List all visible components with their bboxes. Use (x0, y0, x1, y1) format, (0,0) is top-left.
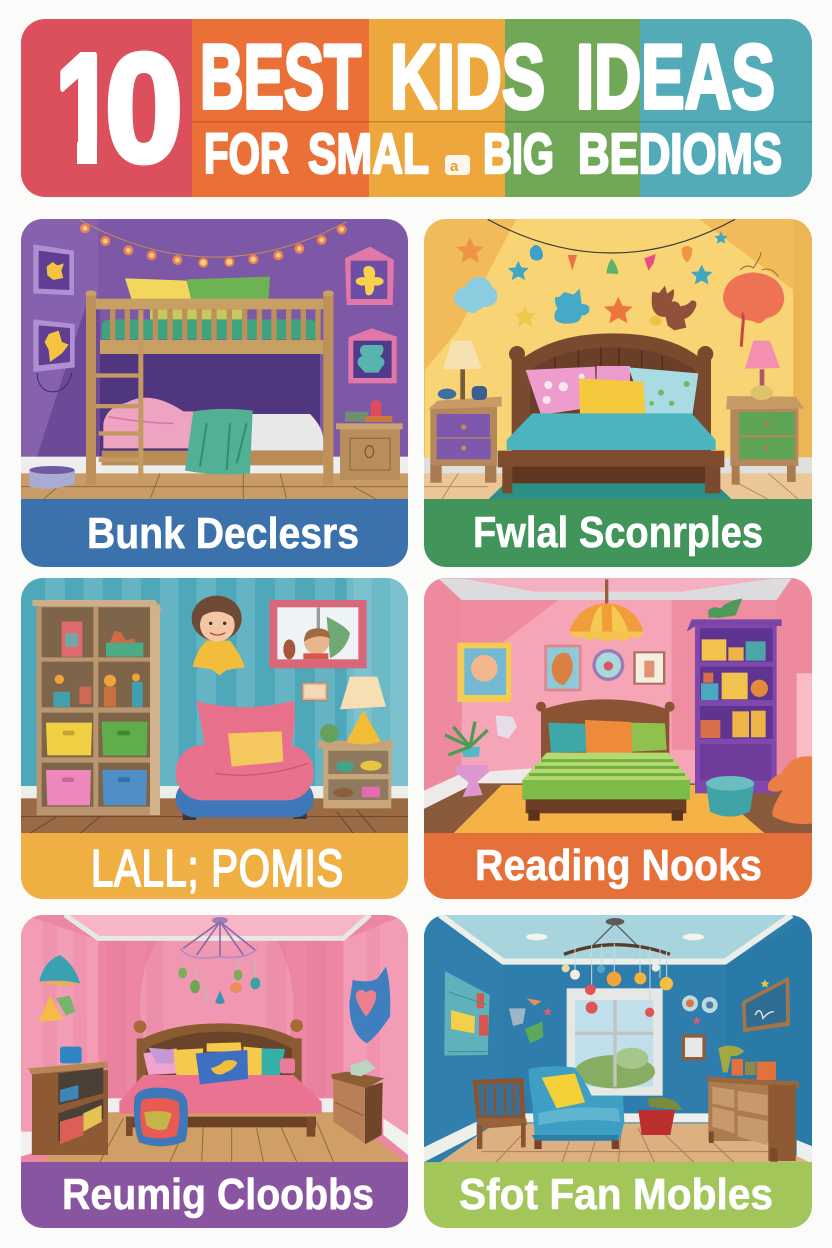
title line two: FOR (204, 122, 289, 186)
bed (119, 1019, 322, 1137)
wall hats (38, 955, 80, 1022)
mobile chandelier (178, 917, 260, 1005)
red bin (638, 1097, 683, 1135)
panel: wall sconces (422, 217, 815, 567)
nightstand (336, 401, 403, 480)
ceiling trim (438, 578, 792, 600)
right nightstand (726, 341, 804, 485)
ceiling trim (65, 915, 370, 938)
illustration: teal striped room (20, 577, 410, 834)
title line two: a (450, 158, 459, 175)
window (567, 988, 663, 1096)
string lights (80, 220, 347, 268)
title line two: SMAL (308, 122, 429, 186)
blue heart shield (349, 967, 390, 1043)
cream lamp (443, 341, 482, 369)
small frame (682, 1034, 706, 1060)
title line one: KIDS (390, 27, 545, 128)
illustration: blue nursery (422, 913, 815, 1163)
framed window picture (269, 600, 367, 668)
wall stars (456, 232, 728, 326)
lower bed (247, 414, 323, 451)
under-bunk shadow (100, 353, 320, 457)
blue creature (554, 289, 590, 324)
lamp and side table (318, 677, 393, 808)
title line one: BEST (200, 27, 361, 128)
big number 10 (46, 22, 183, 194)
chalkboard (742, 977, 790, 1032)
wall decals left (509, 998, 552, 1043)
small wall picture (303, 683, 327, 700)
brown dragon (652, 286, 696, 330)
title line one (200, 27, 775, 128)
panel: pink room (20, 902, 410, 1228)
caption bar (424, 1162, 812, 1228)
pink chair (176, 701, 314, 820)
right dresser (331, 1060, 384, 1144)
storage bins (46, 723, 92, 755)
wall doll (192, 596, 245, 675)
floor basket (29, 466, 75, 489)
left bookcase (28, 1047, 108, 1155)
wall decals right (682, 995, 718, 1024)
garland (488, 219, 735, 274)
blue armchair (528, 1066, 624, 1149)
wall frames (33, 244, 397, 392)
orange plush (768, 756, 813, 824)
caption bar (21, 499, 408, 567)
teal tub (706, 776, 754, 817)
title banner (21, 19, 812, 197)
title line two (204, 122, 782, 186)
bunk bed (85, 277, 334, 485)
notice board (444, 971, 490, 1056)
caption: Reading Nooks: Reading Nooks (475, 841, 762, 890)
bed (522, 699, 690, 821)
caption: Reumig Cloobbs: Reumig Cloobbs (62, 1170, 374, 1219)
illustration: purple bunk room (20, 217, 410, 503)
yellow pillow (542, 1073, 585, 1108)
panel: soft fan mobiles (422, 913, 815, 1228)
panel: bunk beds (20, 217, 410, 567)
cloud (454, 277, 497, 313)
red lantern (723, 253, 784, 347)
caption: LALL; POMIS: LALL; POMIS (91, 840, 344, 898)
illustration: pink reading room (422, 577, 815, 837)
caption bar (424, 499, 812, 567)
bed (498, 333, 724, 493)
caption bar (21, 1162, 408, 1228)
caption: Sfot Fan Mobles: Sfot Fan Mobles (459, 1170, 773, 1219)
pink lamp (745, 341, 780, 369)
illustration: yellow bedroom (422, 217, 815, 503)
left nightstand (428, 341, 502, 483)
patterned cushion (134, 1088, 188, 1146)
ceiling trim (440, 915, 792, 962)
caption bar (21, 833, 408, 899)
purple bookcase (687, 599, 782, 793)
big number 10: 0 (105, 22, 183, 194)
caption: Bunk Declesrs: Bunk Declesrs (87, 509, 359, 558)
caption bar (424, 833, 812, 899)
banner colour bands (21, 19, 812, 197)
wall frames (457, 643, 665, 739)
illustration: pink bedroom (20, 902, 410, 1163)
title line two: BIG (483, 122, 554, 186)
big number 10: 1 (55, 22, 115, 194)
wooden chair (472, 1078, 527, 1149)
plant stand (445, 722, 489, 797)
storage shelf (32, 600, 163, 815)
ceiling mobile (562, 918, 673, 1017)
caption: Fwlal Sconrples: Fwlal Sconrples (473, 508, 763, 557)
dresser (705, 1046, 799, 1162)
panel: lounge room (20, 577, 410, 899)
panel: reading nooks (422, 577, 815, 899)
hanging lamp (569, 579, 643, 641)
